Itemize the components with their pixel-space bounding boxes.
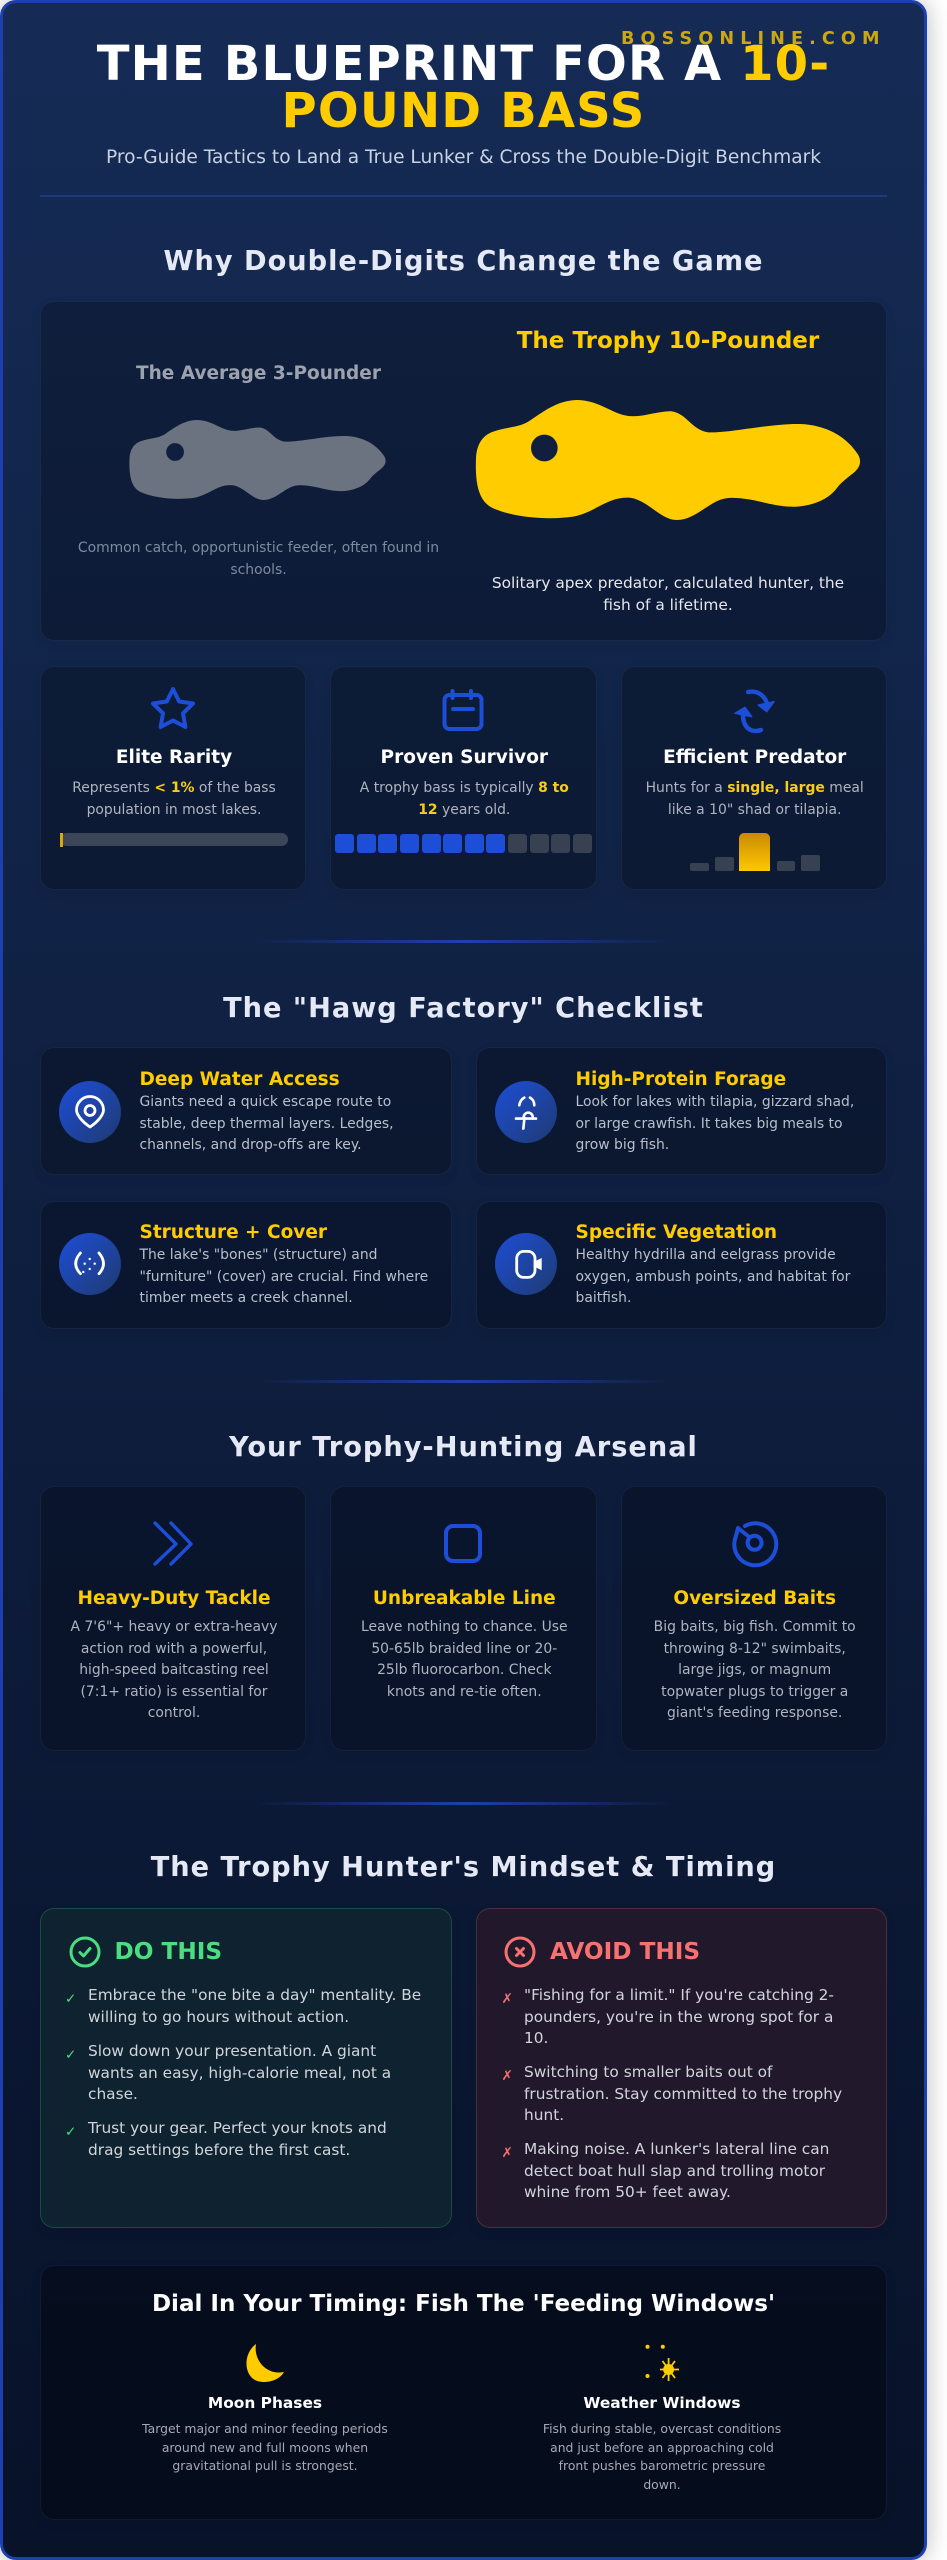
average bass description: Common catch, opportunistic feeder, often found in (78, 540, 439, 556)
section divider (252, 1380, 675, 1383)
card text: 50-65lb braided line or 20- (371, 1641, 557, 1657)
card title: Heavy-Duty Tackle (77, 1588, 271, 1609)
check mark: ✓ (65, 2124, 76, 2140)
card text: Big baits, big fish. Commit to (654, 1619, 856, 1635)
weather text: Fish during stable, overcast conditions (543, 2421, 781, 2436)
panel: feeding windows (40, 2265, 887, 2520)
list item: Trust your gear. Perfect your knots and (88, 2119, 387, 2137)
x mark: ✗ (502, 2145, 513, 2161)
panel: efficient predator (621, 666, 887, 890)
icon: location pin (59, 1081, 121, 1143)
list item: pounders, you're in the wrong spot for a (524, 2008, 833, 2026)
item text: grow big fish. (576, 1137, 669, 1153)
item text: stable, deep thermal layers. Ledges, (140, 1116, 394, 1132)
card text: A 7'6"+ heavy or extra-heavy (71, 1619, 277, 1635)
icon: check circle (70, 1936, 100, 1968)
weather text: and just before an approaching cold (550, 2440, 774, 2455)
item title: Structure + Cover (140, 1222, 327, 1243)
icon: vegetation (495, 1233, 557, 1295)
average bass label: The Average 3-Pounder (136, 363, 381, 384)
panel: high-protein forage (476, 1047, 887, 1175)
brand watermark: BOSSONLINE.COM (621, 29, 886, 49)
trophy bass label: The Trophy 10-Pounder (517, 328, 819, 354)
list item: Switching to smaller baits out of (524, 2063, 772, 2081)
heading: arsenal: Your Trophy-Hunting Arsenal (229, 1432, 698, 1463)
icon: rounded square (444, 1524, 482, 1563)
list item (524, 2140, 829, 2201)
card text (72, 780, 276, 818)
section divider (252, 940, 675, 943)
card text: Hunts for a single, large meal (646, 780, 864, 796)
list item (524, 2063, 842, 2124)
avoid heading: AVOID THIS (550, 1938, 700, 1965)
card text: action rod with a powerful, (81, 1641, 267, 1657)
weather label: Weather Windows (583, 2394, 741, 2412)
item title: Specific Vegetation (576, 1222, 777, 1243)
list item: "Fishing for a limit." If you're catching 2- (524, 1986, 834, 2004)
card text: giant's feeding response. (667, 1705, 842, 1721)
item title: High-Protein Forage (576, 1069, 786, 1090)
moon text: around new and full moons when (162, 2440, 368, 2455)
card text: 25lb fluorocarbon. Check (377, 1662, 552, 1678)
icon: weather sun (646, 2344, 679, 2381)
icon: chevrons (153, 1521, 193, 1566)
card text: A trophy bass is typically 8 to (360, 780, 569, 796)
list item: Slow down your presentation. A giant (88, 2042, 376, 2060)
panel: deep water access (40, 1047, 452, 1175)
card text: 12 years old. (418, 802, 510, 818)
title (96, 36, 830, 138)
panel: oversized baits (621, 1486, 887, 1751)
list item: hunt. (524, 2106, 564, 2124)
item text: oxygen, ambush points, and habitat for (576, 1269, 850, 1285)
card text: Represents < 1% of the bass (72, 780, 276, 796)
do list (65, 1986, 421, 2159)
moon label: Moon Phases (208, 2394, 322, 2412)
trophy bass description (492, 574, 844, 614)
x mark: ✗ (502, 1991, 513, 2007)
heading: checklist: The "Hawg Factory" Checklist (223, 993, 704, 1024)
title: POUND BASS (282, 82, 645, 138)
item text (576, 1094, 854, 1153)
card text: like a 10" shad or tilapia. (668, 802, 841, 818)
section divider (252, 1802, 675, 1805)
trophy bass description: fish of a lifetime. (603, 596, 733, 614)
list item: 10. (524, 2029, 548, 2047)
item text: timber meets a creek channel. (140, 1290, 353, 1306)
item text: Look for lakes with tilapia, gizzard shad, (576, 1094, 854, 1110)
icon: star (150, 686, 195, 730)
list item: frustration. Stay committed to the trophy (524, 2085, 842, 2103)
card title: Oversized Baits (673, 1588, 836, 1609)
weather text: down. (643, 2477, 681, 2492)
icon: x circle (504, 1936, 536, 1968)
card title: Unbreakable Line (373, 1588, 556, 1609)
card text (654, 1619, 856, 1721)
list item: chase. (88, 2085, 138, 2103)
panel: proven survivor (330, 666, 597, 890)
card text: Leave nothing to chance. Use (361, 1619, 568, 1635)
panel: elite rarity (40, 666, 306, 890)
card text: knots and re-tie often. (387, 1684, 542, 1700)
icon: spiral bait (732, 1521, 778, 1568)
card text: (7:1+ ratio) is essential for (80, 1684, 267, 1700)
list item: drag settings before the first cast. (88, 2141, 350, 2159)
weather text: front pushes barometric pressure (559, 2458, 765, 2473)
average bass description: schools. (230, 562, 287, 578)
item text: The lake's "bones" (structure) and (140, 1247, 377, 1263)
list item (524, 1986, 834, 2047)
list item: wants an easy, high-calorie meal, not a (88, 2064, 391, 2082)
card text: high-speed baitcasting reel (79, 1662, 269, 1678)
icon: moon (246, 2344, 284, 2382)
card title: Elite Rarity (116, 747, 232, 768)
card text: large jigs, or magnum (678, 1662, 831, 1678)
item text: "furniture" (cover) are crucial. Find where (140, 1269, 428, 1285)
card text: topwater plugs to trigger a (661, 1684, 848, 1700)
item text: Healthy hydrilla and eelgrass provide (576, 1247, 836, 1263)
icon: calendar (442, 689, 484, 731)
card title: Efficient Predator (663, 747, 846, 768)
item text: or large crawfish. It takes big meals to (576, 1116, 843, 1132)
age segment chart (335, 834, 592, 853)
item title: Deep Water Access (140, 1069, 340, 1090)
card text: population in most lakes. (87, 802, 261, 818)
panel: unbreakable line (330, 1486, 597, 1751)
list item (88, 2042, 391, 2103)
panel: do this (40, 1908, 452, 2228)
icon: forage (495, 1081, 557, 1143)
card text: throwing 8-12" swimbaits, (664, 1641, 846, 1657)
card text (646, 780, 864, 818)
heading: why double digits: Why Double-Digits Change the Game (163, 246, 764, 277)
item text (140, 1094, 394, 1153)
list item: Embrace the "one bite a day" mentality. Be (88, 1986, 421, 2004)
panel: size comparison (40, 301, 887, 641)
list item (88, 2119, 387, 2159)
list item: detect boat hull slap and trolling motor (524, 2162, 825, 2180)
list item (88, 1986, 421, 2026)
trophy bass description: Solitary apex predator, calculated hunter, the (492, 574, 844, 592)
panel: structure and cover (40, 1201, 452, 1329)
moon text: Target major and minor feeding periods (142, 2421, 388, 2436)
card text (360, 780, 569, 818)
title: THE BLUEPRINT FOR A 10- (97, 36, 830, 92)
rarity progress bar (60, 833, 288, 846)
card text (361, 1619, 568, 1700)
avoid list (502, 1986, 842, 2201)
check mark: ✓ (65, 2047, 76, 2063)
list item: willing to go hours without action. (88, 2008, 349, 2026)
icon: structure (59, 1233, 121, 1295)
item text: Giants need a quick escape route to (140, 1094, 391, 1110)
moon text: gravitational pull is strongest. (172, 2458, 358, 2473)
list item: Making noise. A lunker's lateral line can (524, 2140, 829, 2158)
moon text (142, 2421, 388, 2473)
header divider (40, 195, 887, 197)
average bass description (78, 540, 439, 578)
item text: baitfish. (576, 1290, 631, 1306)
list item: whine from 50+ feet away. (524, 2183, 731, 2201)
do this heading: DO THIS (114, 1938, 222, 1965)
item text (139, 1247, 428, 1306)
x mark: ✗ (502, 2068, 513, 2084)
weather text (543, 2421, 781, 2492)
panel title: Dial In Your Timing: Fish The 'Feeding Windows' (152, 2291, 775, 2317)
card title: Proven Survivor (381, 747, 548, 768)
card text: control. (148, 1705, 200, 1721)
item text (576, 1247, 850, 1306)
icon: cycle arrows (734, 689, 775, 734)
item text: channels, and drop-offs are key. (140, 1137, 362, 1153)
panel: heavy-duty tackle (40, 1486, 306, 1751)
bar chart: meal size (690, 833, 820, 871)
subtitle: Pro-Guide Tactics to Land a True Lunker & Cross the Double-Digit Benchmark (106, 147, 821, 168)
check mark: ✓ (65, 1991, 76, 2007)
card text (70, 1619, 277, 1721)
heading: mindset: The Trophy Hunter's Mindset & Timing (151, 1852, 776, 1883)
panel: specific vegetation (476, 1201, 887, 1329)
panel: avoid this (476, 1908, 887, 2228)
